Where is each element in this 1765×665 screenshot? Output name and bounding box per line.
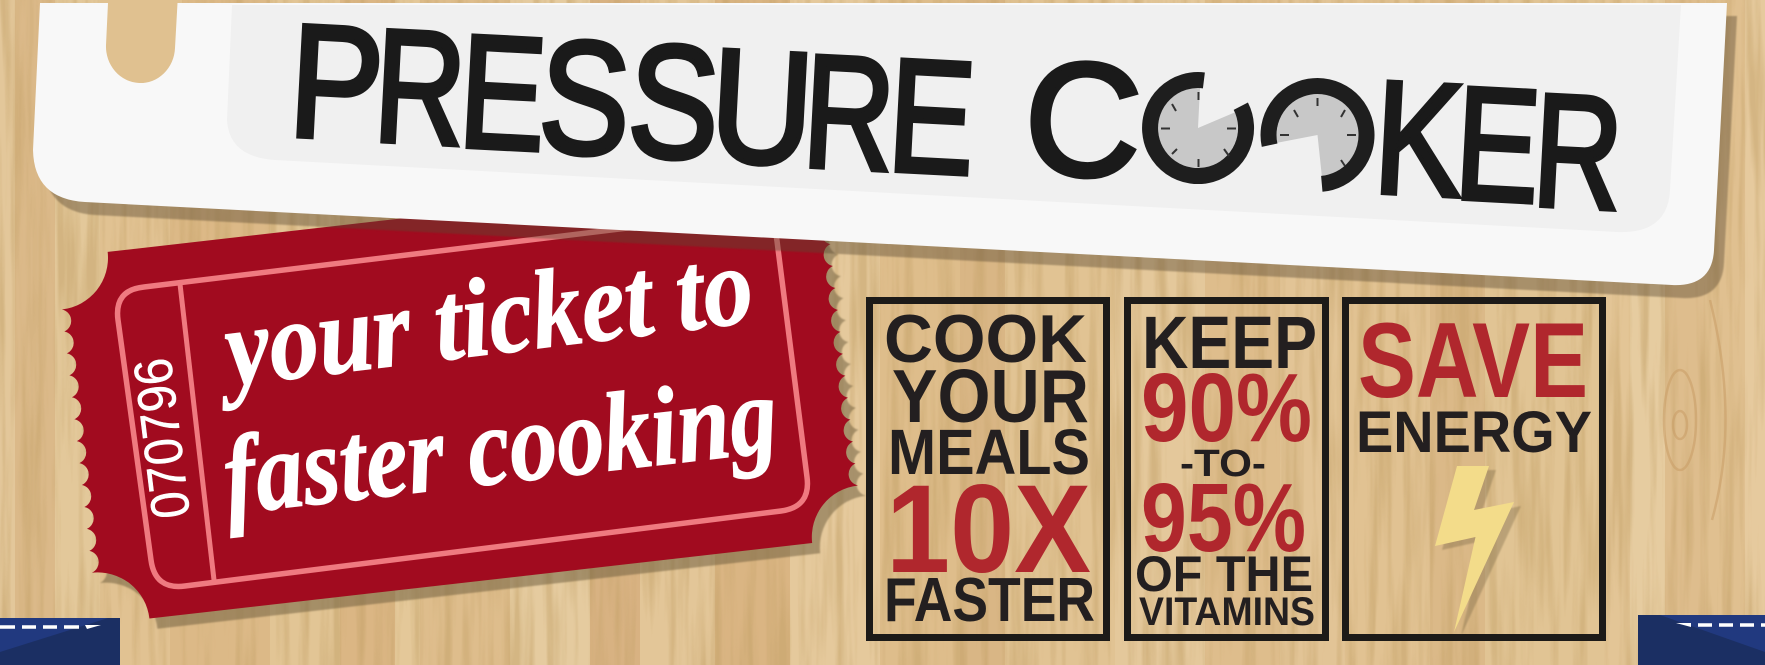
board inset panel <box>227 5 1681 232</box>
text: vitamins: VITAMINS <box>1139 590 1315 634</box>
ticket stub divider <box>180 284 214 580</box>
panel: save energy <box>1346 300 1602 638</box>
title: pressure cooker: E <box>455 0 550 185</box>
title: pressure cooker: S <box>624 9 724 194</box>
title: pressure cooker: R <box>370 0 470 180</box>
title: pressure cooker: S <box>535 5 635 190</box>
ticket headline: your ticket to <box>207 223 759 412</box>
board hole wood patch <box>100 0 182 90</box>
title: pressure cooker: K <box>1370 48 1467 232</box>
jeans pocket right <box>1638 615 1765 665</box>
ticket body <box>56 171 864 624</box>
text: cook your meals: MEALS <box>888 416 1090 488</box>
panel: keep 90% to 95% of the vitamins <box>1128 300 1326 638</box>
cutting board shadow <box>43 16 1737 298</box>
text: keep: KEEP <box>1142 301 1317 384</box>
cutting board <box>33 0 1727 285</box>
title: pressure cooker: U <box>706 16 818 200</box>
title: pressure cooker <box>285 0 1627 244</box>
ticket number: 070796 <box>123 355 202 522</box>
ticket headline: faster cooking <box>217 353 783 539</box>
title: pressure cooker: E <box>884 24 979 209</box>
text: 95%: 95% <box>1141 463 1306 572</box>
panel: cook your meals 10x faster <box>870 300 1106 638</box>
icon: lightning bolt <box>1435 466 1521 636</box>
text: 90%: 90% <box>1141 353 1312 462</box>
board body with hanging hole <box>33 3 1727 285</box>
text: save: SAVE <box>1358 300 1588 420</box>
text: cook your meals: COOK <box>884 301 1087 377</box>
text: faster: FASTER <box>884 566 1095 635</box>
title: pressure cooker: R <box>1529 61 1627 244</box>
ticket inner frame <box>118 214 807 586</box>
text: cook your meals: YOUR <box>892 354 1089 438</box>
text: -to-: -TO- <box>1180 443 1266 485</box>
jeans pocket left <box>0 618 120 665</box>
text: 10x: 10X <box>886 460 1091 599</box>
title: pressure cooker: C <box>1020 27 1146 213</box>
title: pressure cooker: R <box>799 20 899 205</box>
ticket <box>56 171 864 624</box>
ticket drop shadow <box>64 181 872 635</box>
ticket headline <box>207 223 783 539</box>
title: pressure cooker: E <box>1451 52 1544 237</box>
text: of the: OF THE <box>1135 546 1313 602</box>
text: cook your meals <box>884 301 1090 488</box>
text: energy: ENERGY <box>1356 400 1592 465</box>
